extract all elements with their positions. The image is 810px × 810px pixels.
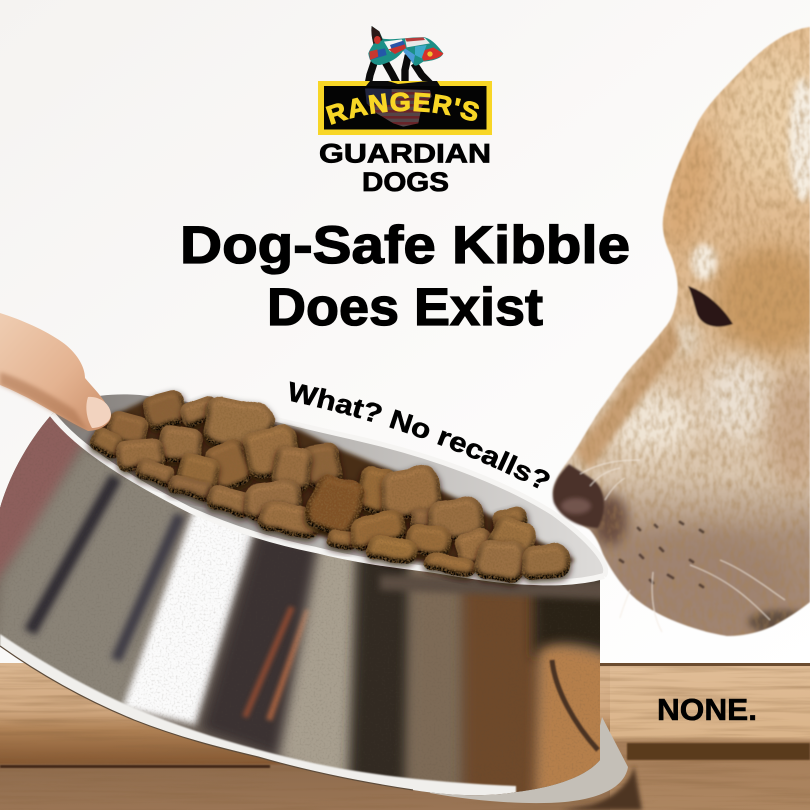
nose highlight — [561, 498, 591, 514]
logo: wordmark line two: DOGS — [362, 167, 449, 197]
caption: none: NONE. — [657, 692, 757, 727]
bowl base lip — [430, 717, 628, 803]
logo: black panel — [324, 86, 486, 130]
wooden table — [0, 663, 810, 810]
bowl outer edge line — [0, 646, 413, 790]
logo: wordmark line one: GUARDIAN — [319, 138, 491, 168]
metal dog bowl — [0, 390, 628, 810]
title — [180, 216, 630, 337]
whiskers — [580, 460, 785, 632]
bowl reflection bands — [0, 414, 600, 796]
bowl back rim highlight — [270, 418, 606, 576]
logo: banner text: RANGER'S — [326, 92, 479, 125]
dog nose — [553, 464, 604, 528]
logo — [318, 26, 492, 197]
title line one: Dog-Safe Kibble — [180, 216, 630, 275]
dog eye — [688, 286, 733, 327]
dog head — [540, 20, 810, 650]
title line two: Does Exist — [267, 278, 543, 337]
logo: mascot feet over banner — [366, 81, 440, 86]
hand holding bowl — [0, 313, 111, 431]
logo: yellow banner — [318, 81, 492, 135]
kibble pile — [87, 388, 575, 583]
logo: guardian dog mascot — [368, 26, 443, 85]
curved caption: What? No recalls? — [290, 381, 550, 488]
bowl front rim highlight — [52, 414, 604, 582]
bowl inside — [52, 394, 606, 582]
logo: US flag map — [365, 88, 432, 126]
